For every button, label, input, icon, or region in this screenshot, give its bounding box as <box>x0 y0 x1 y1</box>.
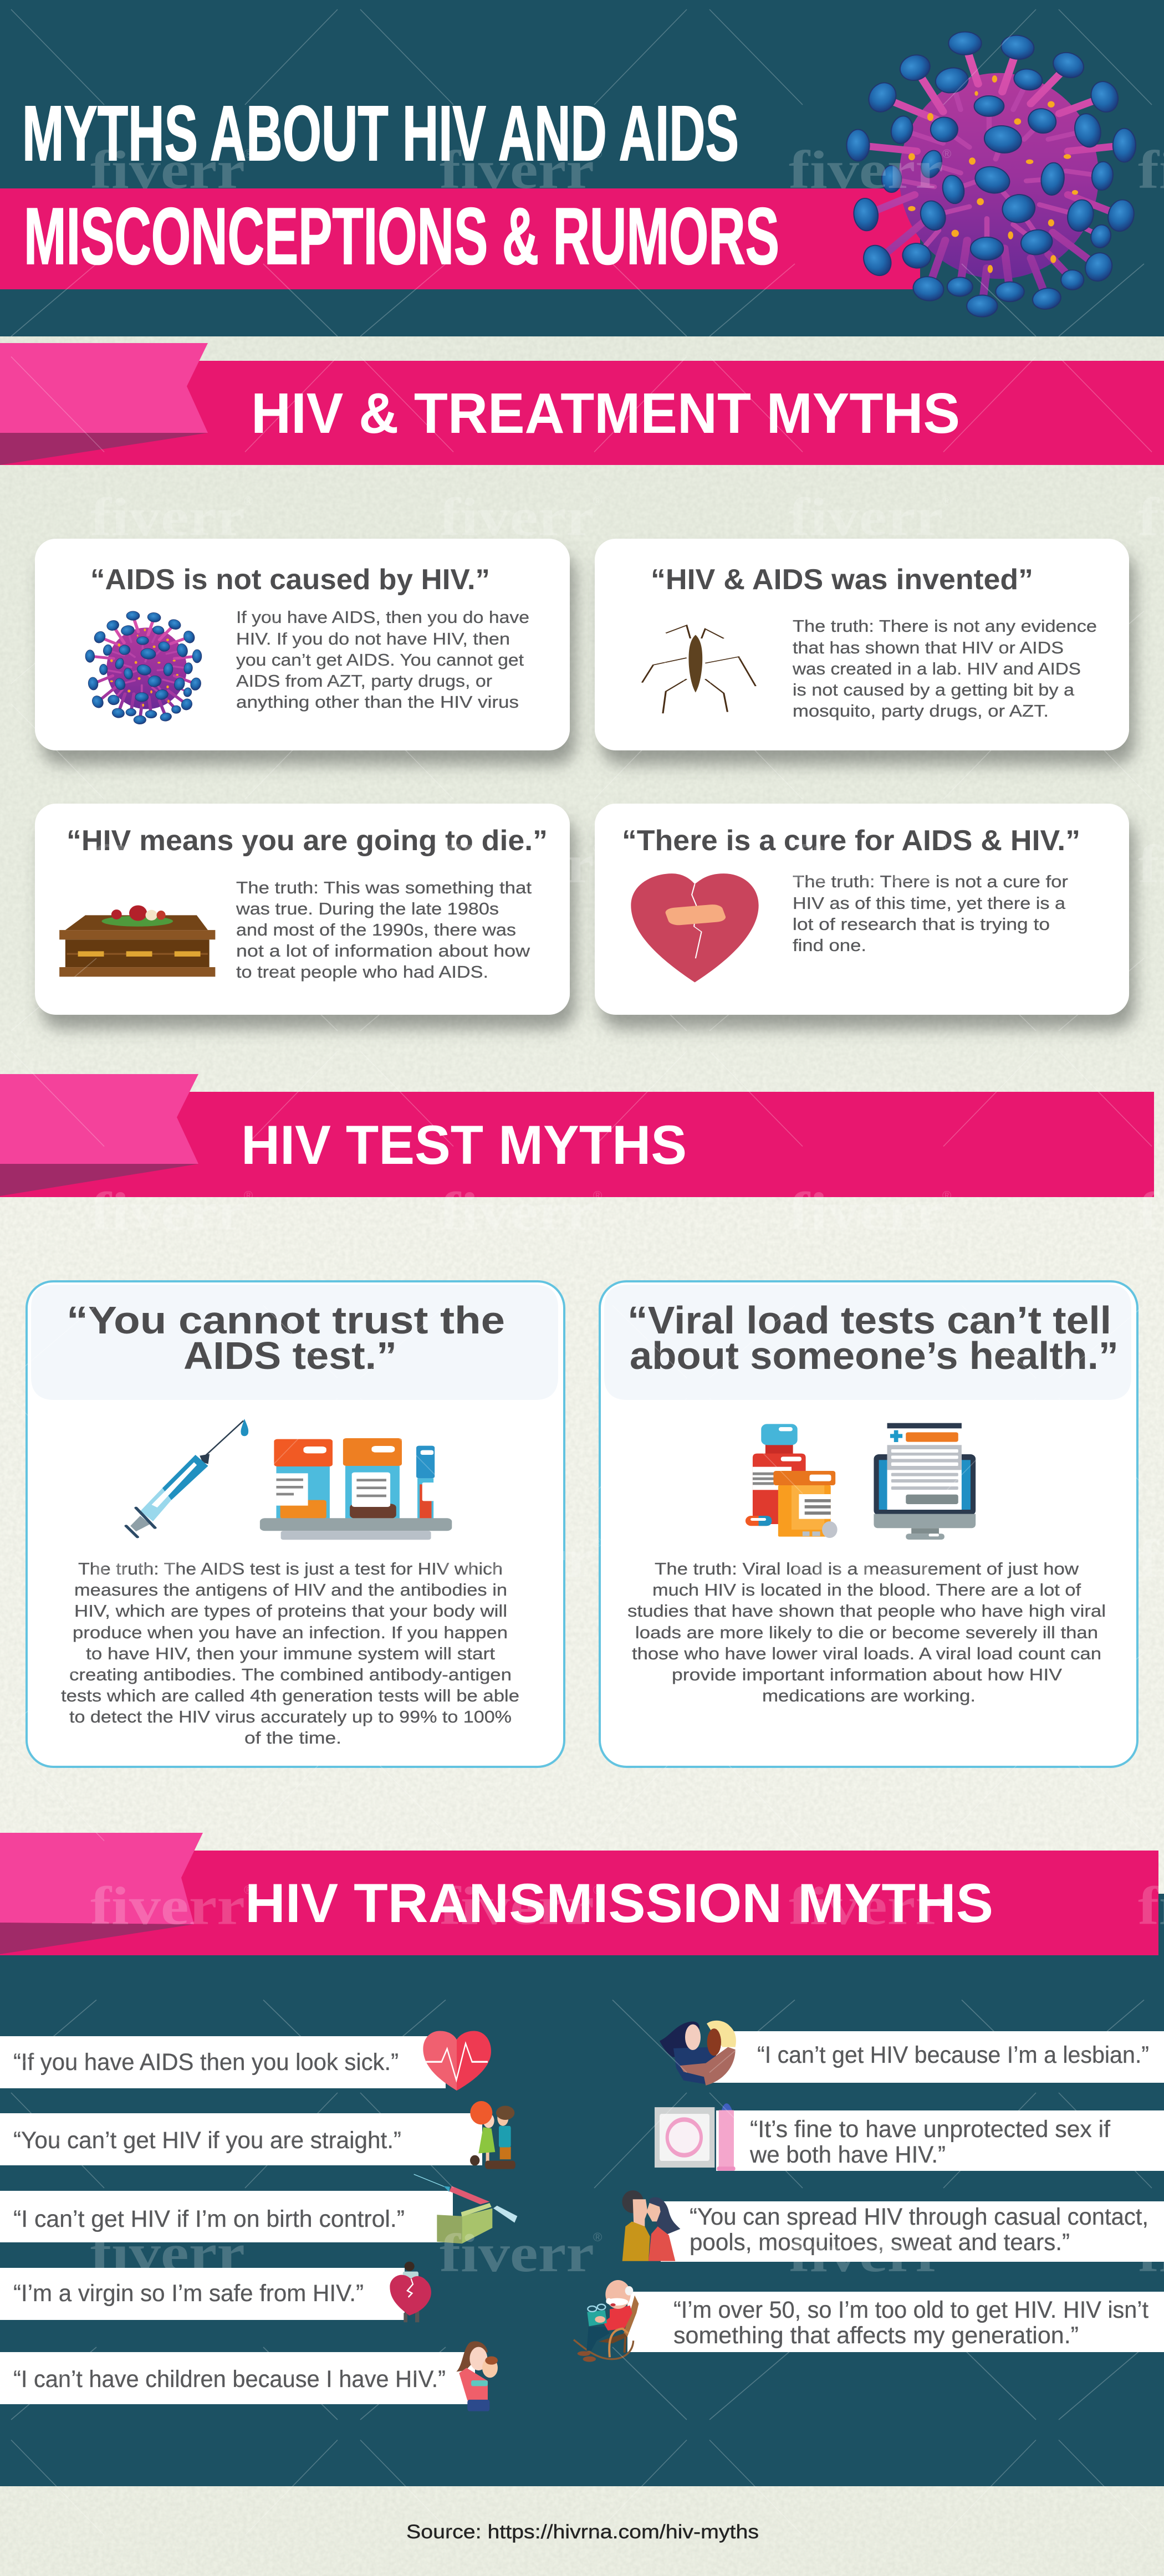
card text: studies that have shown that people who have high viral <box>627 1601 1106 1621</box>
card text: provide important information about how HIV <box>672 1665 1062 1684</box>
card text <box>236 878 532 982</box>
icon: condom <box>655 2103 736 2171</box>
icon: monitor with medical report <box>874 1423 976 1540</box>
card text: and most of the 1990s, there was <box>236 920 516 939</box>
card heading: “There is a cure for AIDS & HIV.” <box>622 825 1080 857</box>
card text: mosquito, party drugs, or AZT. <box>793 701 1049 720</box>
card: HIV and AIDS was invented <box>595 539 1129 750</box>
card text: medications are working. <box>762 1686 976 1705</box>
card text <box>61 1559 519 1747</box>
myth: over 50 <box>574 2280 1164 2362</box>
myth: casual contact: “You can spread HIV through casual contact, <box>690 2204 1148 2230</box>
card: cannot trust the AIDS test <box>27 1281 564 1767</box>
myth: children: “I can’t have children because I have HIV.” <box>13 2366 446 2393</box>
card text: lot of research that is trying to <box>793 914 1050 934</box>
card heading: “HIV means you are going to die.” <box>67 825 548 857</box>
myth: birth control: “I can’t get HIV if I’m on birth control.” <box>13 2206 405 2232</box>
header teal background <box>0 0 1164 336</box>
icon: mother and child <box>456 2341 498 2411</box>
header pink band <box>0 188 920 289</box>
icon: bandaged heart <box>631 873 759 983</box>
card text: you can’t get AIDS. You cannot get <box>236 650 524 669</box>
card text: HIV, which are types of proteins that your body will <box>74 1601 507 1621</box>
icon: kissing women <box>660 2021 736 2086</box>
icon: grandfather in rocking chair <box>574 2280 639 2362</box>
icon: person with broken heart <box>390 2262 431 2322</box>
card text <box>627 1559 1106 1705</box>
card text: anything other than the HIV virus <box>236 692 519 712</box>
card heading <box>627 1299 1119 1377</box>
myth: over 50: something that affects my generation.” <box>673 2322 1079 2349</box>
title: MYTHS ABOUT HIV AND AIDS <box>22 89 739 177</box>
card heading: AIDS test.” <box>183 1334 397 1377</box>
card: there is a cure <box>595 804 1129 1015</box>
card text: measures the antigens of HIV and the antibodies in <box>74 1580 507 1599</box>
banner: HIV transmission myths: HIV TRANSMISSION MYTHS <box>245 1872 993 1934</box>
card text: to detect the HIV virus accurately up to 99% to 100% <box>69 1707 512 1726</box>
icon: large virus <box>846 32 1137 317</box>
header panel <box>0 0 1164 336</box>
card text: is not caused by a getting bit by a <box>793 680 1075 699</box>
card: viral load tests <box>600 1281 1137 1767</box>
card text: those who have lower viral loads. A viral load count can <box>632 1644 1101 1663</box>
icon: syringe <box>126 1419 248 1537</box>
icon: mosquito <box>642 625 755 713</box>
icon: pill bottles <box>746 1424 838 1538</box>
card text: to treat people who had AIDS. <box>236 962 488 982</box>
card text: HIV. If you do not have HIV, then <box>236 629 510 648</box>
card text: find one. <box>793 936 866 955</box>
card heading: “AIDS is not caused by HIV.” <box>90 564 490 596</box>
card text: was created in a lab. HIV and AIDS <box>792 659 1081 678</box>
icon: kissing couple <box>622 2190 680 2261</box>
myth: casual contact: pools, mosquitoes, sweat and tears.” <box>690 2229 1070 2256</box>
icon: coffin <box>59 905 215 977</box>
card text: If you have AIDS, then you do have <box>236 607 529 627</box>
card text: that has shown that HIV or AIDS <box>793 638 1064 657</box>
icon: contraceptive box and syringes <box>414 2174 517 2243</box>
myth: over 50: “I’m over 50, so I’m too old to get HIV. HIV isn’t <box>673 2297 1148 2323</box>
card text: The truth: Viral load is a measurement of just how <box>655 1559 1079 1578</box>
myth: casual contact <box>622 2190 1164 2262</box>
card text: The truth: The AIDS test is just a test for HIV which <box>78 1559 503 1578</box>
myth: look sick <box>0 2031 491 2091</box>
card text <box>792 616 1097 720</box>
card heading: “Viral load tests can’t tell <box>627 1299 1111 1342</box>
myth: lesbian <box>660 2021 1164 2086</box>
card text: The truth: There is not a cure for <box>793 872 1068 891</box>
card text: of the time. <box>244 1728 341 1747</box>
icon: medicine bottles on tray <box>260 1438 452 1540</box>
card text: produce when you have an infection. If you happen <box>73 1623 508 1642</box>
card header tint <box>604 1285 1131 1400</box>
card text: The truth: This was something that <box>236 878 532 897</box>
icon: kissing children <box>470 2101 515 2169</box>
banner: HIV and treatment myths: HIV & TREATMENT MYTHS <box>251 381 960 445</box>
card text: HIV as of this time, yet there is a <box>793 893 1066 913</box>
icon: small virus <box>85 611 202 724</box>
section: HIV transmission myths <box>0 1833 1164 2486</box>
section: HIV and treatment myths <box>0 343 1164 1015</box>
card text <box>236 607 529 712</box>
myth: virgin: “I’m a virgin so I’m safe from HIV.” <box>13 2280 364 2307</box>
card text: not a lot of information about how <box>236 941 530 960</box>
card text: creating antibodies. The combined antibody-antigen <box>69 1665 512 1684</box>
card header tint <box>31 1285 558 1400</box>
card heading <box>67 1299 505 1377</box>
card text: was true. During the late 1980s <box>236 899 499 918</box>
section: HIV test myths <box>0 1074 1154 1767</box>
myth: unprotected sex: “It’s fine to have unprotected sex if <box>750 2116 1111 2143</box>
myth: lesbian: “I can’t get HIV because I’m a lesbian.” <box>757 2042 1149 2068</box>
card text: to have HIV, then your immune system will start <box>86 1644 495 1663</box>
myth: unprotected sex: we both have HIV.” <box>749 2141 946 2168</box>
icon: heart with pulse <box>423 2031 491 2091</box>
myth: virgin <box>0 2262 431 2322</box>
card text <box>793 872 1068 955</box>
myth: look sick: “If you have AIDS then you look sick.” <box>13 2049 399 2076</box>
myth: straight: “You can’t get HIV if you are straight.” <box>13 2127 401 2154</box>
card: HIV means you are going to die <box>35 804 570 1015</box>
myth: children <box>0 2341 498 2411</box>
card text: AIDS from AZT, party drugs, or <box>236 671 492 691</box>
card text: tests which are called 4th generation tests will be able <box>61 1686 519 1705</box>
banner: HIV transmission myths <box>0 1833 1158 1955</box>
card text: The truth: There is not any evidence <box>793 616 1097 636</box>
card heading: “You cannot trust the <box>67 1299 505 1342</box>
card text: much HIV is located in the blood. There are a lot of <box>652 1580 1081 1599</box>
myth: birth control <box>0 2174 517 2243</box>
card heading: “HIV & AIDS was invented” <box>651 564 1033 596</box>
card text: loads are more likely to die or become severely ill than <box>635 1623 1098 1642</box>
myth: straight <box>0 2101 515 2169</box>
source line: Source: https://hivrna.com/hiv-myths <box>406 2521 759 2543</box>
banner: HIV and treatment myths <box>0 343 1164 465</box>
banner: HIV test myths <box>0 1074 1154 1197</box>
banner: HIV test myths: HIV TEST MYTHS <box>241 1114 687 1175</box>
card heading: about someone’s health.” <box>630 1334 1119 1377</box>
card: AIDS is not caused by HIV <box>35 539 570 750</box>
teal panel background <box>0 1894 1164 2486</box>
myth: unprotected sex <box>655 2103 1164 2171</box>
